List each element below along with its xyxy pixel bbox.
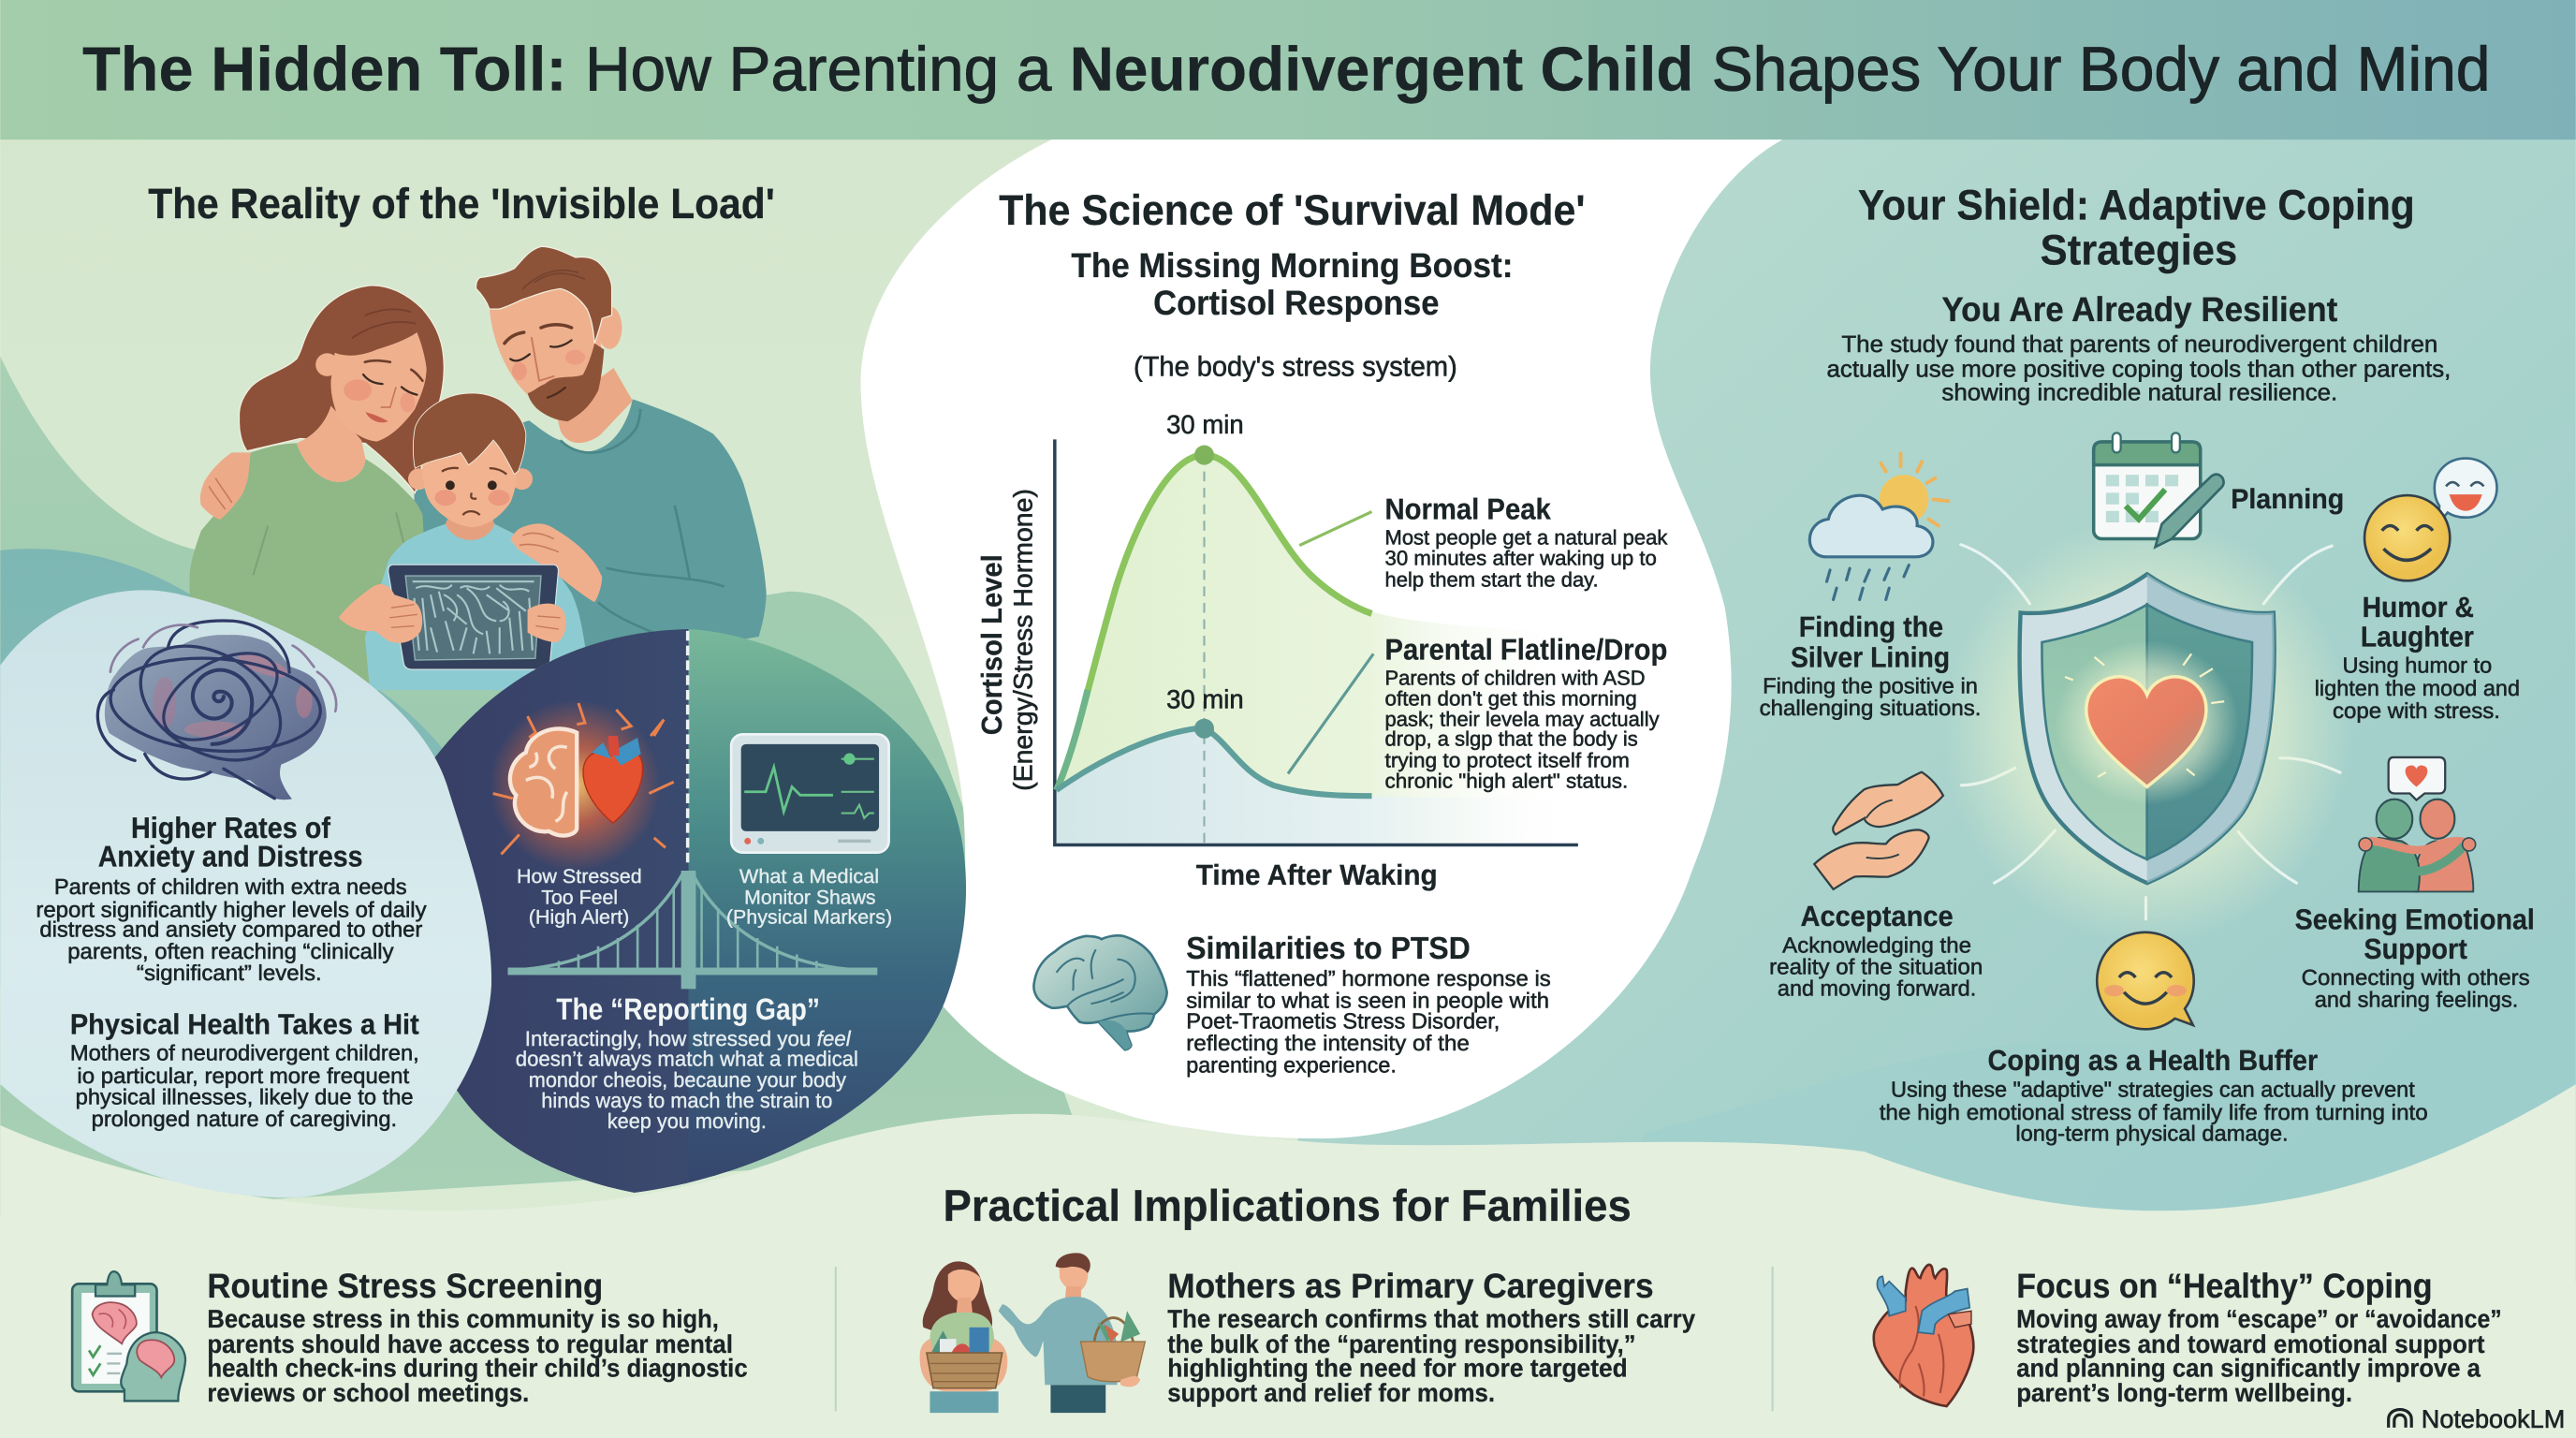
callout: normal peak: Most people get a natural peak xyxy=(1385,526,1669,550)
text: focus: strategies and toward emotional support xyxy=(2016,1331,2484,1359)
icon: shield with heart xyxy=(1941,518,2352,945)
icon: medical monitor xyxy=(731,734,889,853)
text: physical health: prolonged nature of caregiving. xyxy=(92,1107,397,1131)
callout: parental flatline xyxy=(1385,633,1667,793)
text: humor xyxy=(2315,591,2520,723)
text: focus: parent’s long-term wellbeing. xyxy=(2016,1380,2352,1408)
text: mothers: The research confirms that mothers still carry xyxy=(1167,1306,1696,1334)
header band xyxy=(0,0,2576,139)
text: reporting gap: mondor cheois, becaune your body xyxy=(529,1067,847,1092)
labels: felt vs measured: Monitor Shaws xyxy=(744,886,876,909)
text: resilient: showing incredible natural resilience. xyxy=(1941,380,2337,406)
heading: anxiety xyxy=(98,812,363,873)
callout: ptsd: parenting experience. xyxy=(1186,1052,1397,1078)
card: mothers as primary caregivers xyxy=(920,1253,1696,1413)
child xyxy=(365,393,585,690)
text: focus: Moving away from “escape” or “avoidance” xyxy=(2016,1306,2502,1334)
text: coping as a health buffer: the high emotional stress of family life from turning into xyxy=(1880,1100,2428,1124)
callout: normal peak xyxy=(1385,492,1669,592)
text: silver lining: Finding the xyxy=(1799,610,1944,643)
normal curve xyxy=(1057,455,1371,790)
text: acceptance: and moving forward. xyxy=(1778,976,1976,1001)
heading: invisible load: The Reality of the 'Invisible Load' xyxy=(148,179,775,227)
callout: ptsd: Poet-Traometis Stress Disorder, xyxy=(1186,1008,1500,1034)
text: acceptance: Acknowledging the xyxy=(1782,933,1971,958)
text: routine xyxy=(207,1306,748,1408)
icon: brain and heart xyxy=(490,700,674,871)
text: reporting gap: Interactingly, how stressed you feel xyxy=(525,1026,853,1050)
callout: parental flatline: drop, a slgp that the body is xyxy=(1385,727,1638,751)
card: focus on healthy coping xyxy=(1874,1265,2502,1408)
heading: practical implications: Practical Implications for Families xyxy=(944,1181,1632,1230)
text: humor: Humor & xyxy=(2363,591,2474,624)
text: acceptance: Acceptance xyxy=(1800,900,1954,932)
labels: felt vs measured: Too Feel xyxy=(541,886,618,909)
shield spokes xyxy=(1961,545,2340,919)
center white panel shape xyxy=(860,139,1782,1138)
mother xyxy=(189,286,444,690)
leader lines xyxy=(1299,512,1371,546)
labels: felt vs measured: What a Medical xyxy=(739,865,879,888)
icon: calendar xyxy=(2094,433,2224,547)
text: coping as a health buffer: Using these "adaptive" strategies can actually prevent xyxy=(1891,1077,2415,1102)
flat curve xyxy=(1057,727,1371,796)
text: reporting gap: hinds ways to mach the strain to xyxy=(541,1088,832,1112)
labels: felt vs measured xyxy=(517,865,892,929)
text: resilient xyxy=(1827,332,2451,406)
caption: stress system: (The body's stress system) xyxy=(1134,351,1457,382)
text: mothers xyxy=(1167,1306,1696,1408)
text: anxiety: report significantly higher levels of daily xyxy=(36,898,427,922)
callout: ptsd: reflecting the intensity of the xyxy=(1186,1031,1470,1055)
callout: parental flatline: trying to protect itself from xyxy=(1385,749,1630,772)
panel: reporting gap xyxy=(424,629,966,1193)
labels: felt vs measured: (Physical Markers) xyxy=(726,905,892,929)
callout: parental flatline: pask; their levela may actually xyxy=(1385,708,1661,731)
item: planning xyxy=(2094,433,2344,547)
item: humor and laughter xyxy=(2315,459,2520,723)
text: reporting gap: doesn’t always match what a medical xyxy=(516,1046,858,1071)
icon: swirl thought cloud xyxy=(97,621,336,800)
text: physical health: io particular, report more frequent xyxy=(77,1064,410,1089)
item: seeking support xyxy=(2295,757,2535,1012)
father xyxy=(414,246,767,707)
line chart: cortisol xyxy=(975,412,1578,891)
text: routine: Because stress in this community is so high, xyxy=(207,1306,719,1334)
tablet xyxy=(339,565,566,669)
text: acceptance xyxy=(1769,900,1983,1001)
callout: parental flatline: Parents of children with ASD xyxy=(1385,667,1646,690)
text: mothers: support and relief for moms. xyxy=(1167,1380,1495,1408)
text: focus xyxy=(2016,1306,2502,1408)
label: planning: Planning xyxy=(2231,484,2344,515)
text: acceptance: reality of the situation xyxy=(1769,954,1983,979)
text: resilient: The study found that parents of neurodivergent children xyxy=(1841,332,2437,359)
item: acceptance xyxy=(1769,772,1983,1001)
normal area xyxy=(1057,455,1577,844)
heading: your shield: Your Shield: Adaptive Coping xyxy=(1858,180,2415,229)
icon: couple with baskets xyxy=(920,1253,1145,1413)
text: anxiety: parents, often reaching “clinically xyxy=(67,939,394,963)
text: mothers: the bulk of the “parenting responsibility,” xyxy=(1167,1331,1635,1359)
text: mothers: highlighting the need for more targeted xyxy=(1167,1356,1628,1383)
item: finding the silver lining xyxy=(1760,453,1981,720)
heading: focus: Focus on “Healthy” Coping xyxy=(2016,1268,2433,1306)
text: anxiety xyxy=(36,874,427,985)
icon: anatomical heart xyxy=(1874,1265,1973,1406)
text: seeking support: Seeking Emotional xyxy=(2295,902,2535,935)
heading: your shield xyxy=(1858,180,2415,274)
dashed divider xyxy=(687,631,689,867)
title xyxy=(82,37,2490,105)
text: reporting gap: keep you moving. xyxy=(607,1108,767,1133)
text: coping as a health buffer xyxy=(1880,1044,2428,1146)
heading: reporting gap: The “Reporting Gap” xyxy=(556,991,820,1026)
flat area xyxy=(1057,727,1577,844)
text: anxiety: Parents of children with extra needs xyxy=(54,874,407,899)
card: routine stress screening xyxy=(72,1268,748,1408)
text: silver lining: Finding the positive in xyxy=(1763,673,1978,698)
y axis label: Cortisol Level xyxy=(975,554,1008,735)
text: coping as a health buffer: long-term physical damage. xyxy=(2015,1122,2289,1146)
text: seeking support: Connecting with others xyxy=(2302,965,2530,990)
heading: your shield: Strategies xyxy=(2041,225,2237,274)
title: Neurodivergent Child xyxy=(1070,37,1693,105)
text: physical health: physical illnesses, likely due to the xyxy=(76,1085,414,1109)
subheading: cortisol: The Missing Morning Boost: xyxy=(1071,247,1513,286)
icon: embracing friends xyxy=(2359,757,2476,891)
subheading: cortisol xyxy=(1071,247,1513,323)
labels: felt vs measured: (High Alert) xyxy=(529,905,629,929)
callout: parental flatline: often don't get this morning xyxy=(1385,687,1637,711)
heading: mothers: Mothers as Primary Caregivers xyxy=(1167,1268,1654,1306)
text: anxiety: distress and ansiety compared to other xyxy=(39,917,423,942)
text: anxiety: “significant” levels. xyxy=(137,961,322,985)
text: routine: health check-ins during their child’s diagnostic xyxy=(207,1356,748,1383)
callout: parental flatline: chronic "high alert" status. xyxy=(1385,770,1628,793)
heading: survival mode: The Science of 'Survival Mode' xyxy=(999,185,1586,234)
father hand xyxy=(510,523,602,602)
callout: normal peak: Normal Peak xyxy=(1385,492,1552,526)
text: silver lining: challenging situations. xyxy=(1760,696,1981,720)
callout: ptsd: This “flattened” hormone response is xyxy=(1186,966,1551,990)
subheading: resilient: You Are Already Resilient xyxy=(1941,291,2337,330)
text: routine: reviews or school meetings. xyxy=(207,1380,529,1408)
dividers xyxy=(836,1267,1773,1411)
text: coping as a health buffer: Coping as a Health Buffer xyxy=(1988,1044,2319,1077)
text: seeking support xyxy=(2295,902,2535,1012)
text: physical health: Mothers of neurodivergent children, xyxy=(70,1041,419,1065)
icon: bridge xyxy=(508,871,877,989)
heading: routine: Routine Stress Screening xyxy=(207,1268,603,1306)
title: Shapes Your Body and Mind xyxy=(1712,37,2490,105)
icon: sun and rain cloud xyxy=(1809,453,1948,599)
callout: normal peak: help them start the day. xyxy=(1385,568,1599,592)
text: silver lining xyxy=(1760,610,1981,720)
labels: felt vs measured: How Stressed xyxy=(517,865,642,888)
peak labels: 30 min xyxy=(1166,412,1244,440)
callout: ptsd xyxy=(1186,932,1551,1078)
axes xyxy=(1055,439,1578,844)
title: How Parenting a xyxy=(585,37,1053,105)
callout: parental flatline: Parental Flatline/Drop xyxy=(1385,633,1667,667)
text: focus: and planning can significantly improve a xyxy=(2016,1356,2481,1383)
callout: ptsd: similar to what is seen in people with xyxy=(1186,988,1549,1013)
text: seeking support: Support xyxy=(2364,932,2467,965)
subheading: cortisol: Cortisol Response xyxy=(1153,285,1439,323)
bottom pale band xyxy=(0,1084,2576,1438)
text: physical health xyxy=(70,1041,419,1131)
icon: clipboard and brain xyxy=(72,1271,185,1401)
icon: smiling speech bubble xyxy=(2097,932,2194,1029)
notebooklm logo: NotebookLM xyxy=(2422,1406,2565,1434)
title: The Hidden Toll: xyxy=(82,37,567,105)
text: silver lining: Silver Lining xyxy=(1791,640,1950,673)
text: seeking support: and sharing feelings. xyxy=(2315,988,2518,1012)
heading: physical health: Physical Health Takes a Hit xyxy=(70,1008,419,1041)
text: humor: lighten the mood and xyxy=(2315,676,2520,700)
icon: laughing smiley xyxy=(2364,459,2496,580)
y axis label: (Energy/Stress Hormone) xyxy=(1010,489,1038,791)
text: resilient: actually use more positive coping tools than other parents, xyxy=(1827,358,2451,384)
panel: anxiety and physical health xyxy=(0,590,491,1197)
line chart: cortisol: 30 min xyxy=(1166,686,1244,714)
icon: open hands xyxy=(1814,772,1943,889)
heading: anxiety: Higher Rates of xyxy=(131,812,332,844)
y axis label xyxy=(975,489,1038,791)
family illustration xyxy=(189,246,767,707)
heading: anxiety: Anxiety and Distress xyxy=(98,841,363,873)
callout: normal peak: 30 minutes after waking up to xyxy=(1385,547,1657,570)
icon: teal brain xyxy=(1033,935,1167,1049)
text: reporting gap xyxy=(516,1026,858,1133)
text: humor: Using humor to xyxy=(2343,653,2492,678)
text: humor: cope with stress. xyxy=(2333,698,2500,723)
callout: ptsd: Similarities to PTSD xyxy=(1186,932,1471,967)
x axis label: Time After Waking xyxy=(1196,858,1438,891)
text: humor: Laughter xyxy=(2361,620,2474,653)
text: routine: parents should have access to regular mental xyxy=(207,1331,733,1359)
